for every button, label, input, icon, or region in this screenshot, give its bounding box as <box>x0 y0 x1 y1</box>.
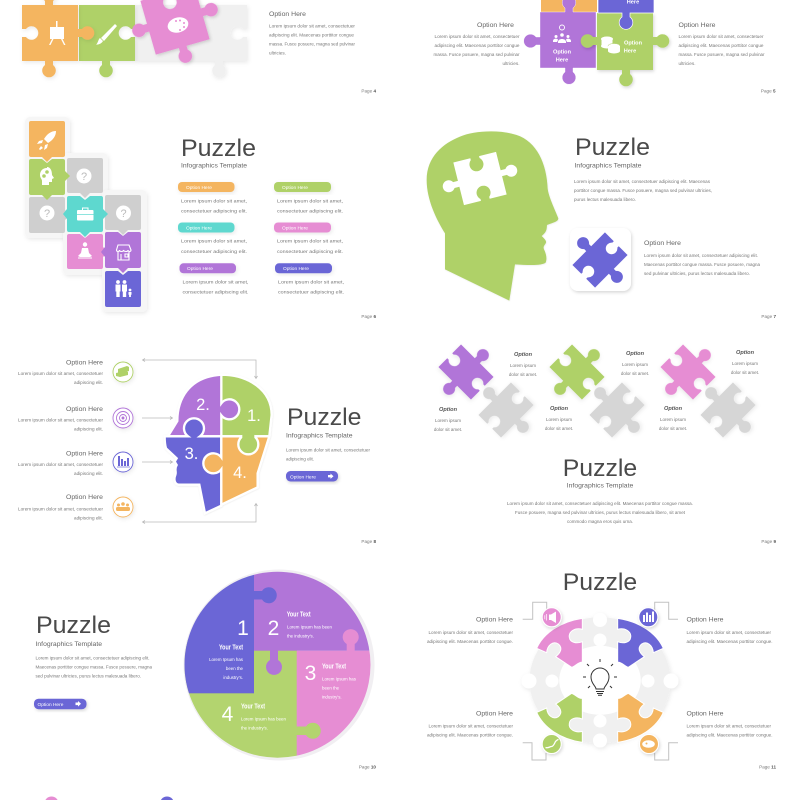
panel: page 11 puzzle ring <box>427 569 776 770</box>
icon: rocket <box>37 131 56 150</box>
pill: green option <box>274 182 331 192</box>
text: top left option: Option Here <box>476 617 513 624</box>
number 1: 1 <box>237 617 249 640</box>
panel: page 9 puzzle pieces <box>429 335 776 544</box>
icon: light bulb <box>583 659 617 695</box>
teal tile <box>63 196 108 237</box>
text: page 4 option: Lorem ipsum dolor sit amet, consectetuer <box>269 24 356 28</box>
text: option 3: Option Here <box>66 451 103 458</box>
grey tile right <box>105 195 141 235</box>
text: purple option: Option <box>514 352 533 358</box>
connectors <box>523 602 678 760</box>
circle pieces <box>184 572 370 758</box>
connector: third <box>142 460 172 464</box>
text block <box>181 198 247 214</box>
paragraph: Lorem ipsum dolor sit amet, consectetuer adipiscing elit. <box>36 655 150 660</box>
circle backing ring <box>184 570 374 760</box>
panel: page 5 puzzle cross <box>434 0 776 94</box>
text: option 1 <box>18 360 104 385</box>
text: bottom right option: Lorem ipsum dolor sit amet, consectetuer <box>686 724 772 728</box>
page number 9: Page 9 <box>761 539 776 544</box>
text: grey 3 option: dolor sit amet. <box>659 426 687 431</box>
puzzle piece: green <box>581 13 669 86</box>
paragraph <box>507 501 693 524</box>
page number 5: Page 5 <box>761 88 776 94</box>
text: segment 3: Your Text <box>322 662 346 671</box>
subtitle: Infographics Template <box>181 162 247 170</box>
number 3: 3 <box>305 662 316 685</box>
text: option 4 <box>18 494 104 520</box>
panel: page 6 text <box>178 135 376 319</box>
text block <box>277 198 343 214</box>
text block <box>182 280 248 295</box>
text: option: Maecenas porttitor congue massa. Fusce posuere, magna <box>644 262 760 267</box>
text: pink option: dolor sit amet. <box>731 370 759 375</box>
pill: blue option <box>275 263 332 273</box>
text: option 4: adipiscing elit. <box>74 516 103 520</box>
icon: question grey right <box>116 206 131 220</box>
ring icon: purple target <box>113 408 133 428</box>
notches in grey ring <box>522 613 678 748</box>
text: option 4: Option Here <box>66 494 103 501</box>
icon: question grey left <box>40 206 54 220</box>
icon: family <box>115 280 132 297</box>
puzzle piece: orange <box>541 0 597 12</box>
knob: blue <box>254 587 277 603</box>
orange tile <box>29 121 65 162</box>
text block: Lorem ipsum dolor sit amet, <box>181 239 247 244</box>
text: option 4: Lorem ipsum dolor sit amet, consectetuer <box>18 506 104 512</box>
text block <box>278 280 344 295</box>
text: bottom right option: Option Here <box>686 710 724 718</box>
green tile <box>29 159 70 200</box>
text: option 1: adipiscing elit. <box>74 380 103 385</box>
text block: Lorem ipsum dolor sit amet, <box>182 280 248 284</box>
connector: top <box>142 358 258 378</box>
paragraph: commodo magna eros quis urna. <box>567 519 633 524</box>
text: top left option: adipiscing elit. Maecenas porttitor congue. <box>427 639 513 644</box>
paragraph: Lorem ipsum dolor sit amet, consectetuer adipiscing elit. Maecenas porttitor congue massa. <box>507 501 693 506</box>
puzzle cut-out in head <box>438 148 522 209</box>
pill: pink option: Option Here <box>282 225 308 231</box>
text: grey 2 option <box>545 406 573 431</box>
text block: consectetuer adipiscing elit. <box>182 290 248 295</box>
title: Puzzle <box>181 135 256 162</box>
badge: orange cloud <box>640 734 658 754</box>
puzzle piece: purple <box>524 0 596 84</box>
icon: question grey right: ? <box>120 208 127 220</box>
text: segment 4: Your Text <box>241 702 265 711</box>
puzzle piece: grey <box>135 5 247 77</box>
paragraph: porttitor congue massa. Fusce posuere, magna sed pulvinar ultricies, <box>574 188 712 193</box>
paragraph <box>574 179 712 202</box>
text: page 5 right option: Lorem ipsum dolor sit amet, consectetuer <box>678 34 764 39</box>
piece: green 4 <box>184 640 297 758</box>
label: option here purple: Here <box>556 58 568 64</box>
text: top right option: Lorem ipsum dolor sit amet, consectetuer <box>686 630 772 635</box>
text: option 2: adipiscing elit. <box>74 426 103 432</box>
text: page 4 option: ultricies. <box>269 50 286 56</box>
text block: consectetuer adipiscing elit. <box>181 208 247 214</box>
text: top right option: adipiscing elit. Maecenas porttitor congue. <box>686 639 772 644</box>
text: page 5 right option: ultricies. <box>678 61 696 66</box>
title: Puzzle <box>287 404 362 431</box>
icon: briefcase <box>77 208 94 220</box>
piece: pink <box>651 335 725 409</box>
text: page 4 option <box>269 11 356 56</box>
icon: question grey top <box>76 168 92 184</box>
number 1: 1. <box>247 407 261 425</box>
text: grey 3 option: Option <box>664 406 683 412</box>
text: grey 1 option: Option <box>439 407 458 413</box>
label: option here green: Here <box>624 48 636 54</box>
number 2: 2. <box>196 396 210 414</box>
icon: question grey left: ? <box>44 208 50 220</box>
text: bottom left option: Lorem ipsum dolor sit amet, consectetuer <box>428 724 514 728</box>
label: option here purple: Option <box>553 50 571 56</box>
text: segment 1 <box>209 642 244 680</box>
text: segment 3 <box>322 662 357 700</box>
head silhouette <box>427 131 558 301</box>
text block <box>277 239 343 254</box>
icon: meditating person <box>78 242 92 258</box>
text: grey 2 option: Lorem ipsum <box>546 417 572 422</box>
text: grey 2 option: dolor sit amet. <box>545 426 573 431</box>
text: segment 1: Your Text <box>219 642 243 652</box>
text: segment 3: been the <box>322 686 340 690</box>
text: option: sed pulvinar ultricies, purus lectus malesuada libero. <box>644 271 750 276</box>
puzzle piece: green <box>79 5 135 77</box>
text: grey 3 option: Lorem ipsum <box>660 417 686 422</box>
text: page 5 left option: massa. Fusce posuere, magna sed pulvinar <box>434 52 520 57</box>
text: segment 2: Your Text <box>287 610 311 619</box>
piece: green <box>537 693 582 742</box>
text: bottom right option: adipiscing elit. Maecenas porttitor congue. <box>686 732 772 738</box>
ring icon: blue chart <box>113 452 133 472</box>
next page knobs at bottom edge <box>44 796 174 800</box>
text: option 3: Lorem ipsum dolor sit amet, consectetuer <box>18 462 104 467</box>
pink tile <box>67 234 108 269</box>
knob: purple <box>266 650 282 675</box>
panel: page 4 puzzle strip <box>22 0 376 93</box>
paragraph: purus lectus malesuada libero. <box>574 197 636 202</box>
paragraph <box>286 448 370 462</box>
paragraph <box>36 655 152 678</box>
subtitle: Infographics Template <box>286 432 353 440</box>
paragraph: Fusce posuere, magna sed pulvinar ultricies, purus lectus malesuada libero, sit amet <box>515 510 686 515</box>
piece: purple <box>429 335 503 409</box>
text: grey 1 option <box>434 407 462 432</box>
icon: paint brush <box>96 24 117 45</box>
button: Option Here <box>38 702 64 708</box>
panel: page 6 icon tiles <box>25 117 147 312</box>
text: option 3: adipiscing elit. <box>74 471 103 476</box>
panel: page 7 head <box>427 131 776 319</box>
text: option <box>644 240 760 276</box>
text: grey 3 option <box>659 406 687 431</box>
pill: green option: Option Here <box>282 185 308 191</box>
card with blue puzzle piece <box>563 223 637 297</box>
icon: coins <box>601 36 620 54</box>
text: grey 1 option: dolor sit amet. <box>434 427 462 432</box>
icon: blue puzzle piece <box>563 223 637 297</box>
text: pink option: Lorem ipsum <box>732 361 758 366</box>
paragraph: sed pulvinar ultricies, purus lectus malesuada libero. <box>36 673 141 678</box>
ring icon: green cash <box>113 362 133 382</box>
tile backing: middle column <box>63 153 108 275</box>
grey tile left <box>29 197 70 233</box>
number 3: 3. <box>185 445 198 463</box>
piece: green 1 <box>221 375 272 436</box>
piece: orange <box>618 693 663 742</box>
text: pink option <box>731 350 759 375</box>
subtitle: Infographics Template <box>567 482 633 490</box>
pill: teal option: Option Here <box>186 225 212 231</box>
piece: blue 3 <box>165 418 221 513</box>
purple tile <box>101 232 141 273</box>
piece: purple 2 <box>168 375 239 436</box>
text: page 4 option: adipiscing elit. Maecenas porttitor congue <box>269 32 354 38</box>
piece: blue 1 <box>184 574 254 694</box>
piece: purple 2 <box>254 572 370 651</box>
text block: Lorem ipsum dolor sit amet, <box>277 198 343 203</box>
knob: pink <box>343 629 359 651</box>
pill: purple option: Option Here <box>187 266 213 272</box>
connector: bottom <box>142 504 258 524</box>
icon: head with gears <box>40 167 54 185</box>
text block: Lorem ipsum dolor sit amet, <box>181 198 247 203</box>
button: Option Here <box>290 474 316 480</box>
grey ring <box>522 613 678 748</box>
text: page 5 left option: Lorem ipsum dolor sit amet, consectetuer <box>434 34 520 39</box>
title: Puzzle <box>563 569 637 596</box>
text: segment 2: Lorem Ipsum has been <box>287 624 332 630</box>
text: option: Option Here <box>644 240 681 247</box>
green knob <box>238 434 258 454</box>
icon: easel <box>49 21 66 45</box>
puzzle piece: orange <box>22 0 94 77</box>
text: grey 2 option: Option <box>550 406 569 412</box>
text: green option <box>621 351 649 376</box>
piece: blue <box>618 618 663 667</box>
text: page 5 left option: ultricies. <box>502 61 520 66</box>
blue tile <box>105 271 141 307</box>
text: grey 1 option: Lorem ipsum <box>435 418 461 423</box>
text: segment 1: been the <box>226 666 244 671</box>
pill: teal option <box>178 222 234 232</box>
paragraph: adipiscing elit. <box>286 456 314 462</box>
piece: pink 3 <box>296 650 370 756</box>
text: bottom right option <box>686 710 772 738</box>
puzzle piece: blue <box>598 0 654 29</box>
text: bottom left option: Option Here <box>476 710 513 718</box>
text: option 1: Option Here <box>66 360 103 366</box>
text: segment 4: the industry's. <box>241 726 268 730</box>
knob: green <box>296 723 321 739</box>
text: option 2: Lorem ipsum dolor sit amet, consectetuer <box>18 418 104 422</box>
piece: green <box>540 335 614 409</box>
page number 10: Page 10 <box>359 764 376 770</box>
text: segment 1: industry's. <box>223 675 243 680</box>
icon: arrow <box>328 474 334 479</box>
text: option 1: Lorem ipsum dolor sit amet, consectetuer <box>18 371 104 376</box>
pill: blue option: Option Here <box>283 266 309 272</box>
text block: consectetuer adipiscing elit. <box>278 290 344 295</box>
number 4: 4. <box>233 464 247 482</box>
text: segment 2 <box>287 610 332 638</box>
icon: arrow <box>76 701 81 707</box>
text block: consectetuer adipiscing elit. <box>181 249 247 254</box>
piece: grey 2 <box>580 373 654 447</box>
pill: purple option <box>180 263 236 273</box>
green knob neck <box>242 433 254 440</box>
head puzzle pieces <box>165 375 272 513</box>
knob: blue <box>160 796 174 800</box>
badge: blue chart <box>639 608 658 627</box>
title: Puzzle <box>36 612 111 639</box>
text block <box>181 239 247 254</box>
text: page 5 right option: massa. Fusce posuere, magna sed pulvinar <box>678 52 765 57</box>
text: purple option <box>509 352 537 377</box>
tile backing: right column <box>102 190 147 312</box>
text: segment 2: the industry's. <box>287 634 314 638</box>
text: top right option: Option Here <box>686 617 724 624</box>
text: page 5 left option: adipiscing elit. Maecenas porttitor congue <box>434 43 520 48</box>
paragraph: Lorem ipsum dolor sit amet, consectetuer <box>286 448 370 452</box>
text: page 4 option: massa. Fusce posuere, magna sed pulvinar <box>269 42 355 46</box>
text block: Lorem ipsum dolor sit amet, <box>278 280 344 284</box>
text block: consectetuer adipiscing elit. <box>277 249 343 254</box>
text: option 2 <box>18 406 104 432</box>
tile backing: left column <box>25 117 70 238</box>
title: Puzzle <box>563 455 637 482</box>
text: top right option <box>686 617 772 644</box>
text block: Lorem ipsum dolor sit amet, <box>277 239 343 244</box>
text: page 5 right option: adipiscing elit. Maecenas porttitor congue <box>678 43 764 48</box>
text: segment 3: Lorem Ipsum has <box>322 676 357 682</box>
number 2: 2 <box>268 617 279 640</box>
text: option 3 <box>18 451 104 476</box>
button <box>286 471 338 482</box>
panel: page 8 puzzle head <box>18 358 376 544</box>
badge: green tool <box>542 734 561 754</box>
text: green option: Lorem ipsum <box>622 362 648 367</box>
pill: pink option <box>274 222 331 232</box>
knob: pink <box>44 796 58 800</box>
text: segment 4 <box>241 702 286 730</box>
text: top left option: Lorem ipsum dolor sit amet, consectetuer <box>428 630 514 635</box>
panel: page 10 puzzle circle <box>180 565 377 771</box>
page number 6: Page 6 <box>361 314 376 319</box>
piece: pink <box>537 618 582 667</box>
text: page 4 option: Option Here <box>269 11 306 18</box>
text: segment 3: industry's. <box>322 694 342 700</box>
text: purple option: Lorem ipsum <box>510 363 536 368</box>
text: page 5 left option: Option Here <box>477 22 514 29</box>
page number 11: Page 11 <box>759 764 776 770</box>
page number 7: Page 7 <box>761 314 776 319</box>
text: green option: Option <box>626 351 645 357</box>
page number 8: Page 8 <box>361 539 376 544</box>
pill: orange option: Option Here <box>186 185 212 191</box>
text: option: Lorem ipsum dolor sit amet, consectetuer adipiscing elit. <box>644 253 758 258</box>
icon: shop <box>116 245 131 260</box>
text: page 5 right option: Option Here <box>678 22 716 29</box>
title: Puzzle <box>575 134 650 161</box>
text: page 5 right option <box>678 22 765 66</box>
badge: pink speaker <box>542 608 561 627</box>
page number 4: Page 4 <box>361 88 376 94</box>
text: option 2: Option Here <box>66 406 103 413</box>
ring icon: orange team <box>113 497 133 517</box>
connector: second <box>142 416 172 420</box>
subtitle: Infographics Template <box>36 641 102 648</box>
text: top left option <box>427 617 514 644</box>
text: segment 1: Lorem Ipsum has <box>209 657 244 662</box>
text: pink option: Option <box>736 350 755 356</box>
icon: palette <box>166 15 190 35</box>
pill: orange option <box>178 182 234 192</box>
icon: people and pin <box>553 25 571 43</box>
puzzle piece: pink rotated <box>125 0 230 75</box>
text: bottom left option <box>427 710 514 738</box>
panel: page 10 left text <box>34 612 152 709</box>
text: segment 4: Lorem Ipsum has been <box>241 716 286 722</box>
text: page 5 left option <box>434 22 520 66</box>
grey tile top <box>67 158 103 198</box>
icon: question grey top: ? <box>81 171 87 183</box>
label: option here green: Option <box>624 40 642 46</box>
text block: consectetuer adipiscing elit. <box>277 208 343 214</box>
text: purple option: dolor sit amet. <box>509 372 537 377</box>
piece: grey 3 <box>691 373 765 447</box>
paragraph: Lorem ipsum dolor sit amet, consectetuer adipiscing elit. Maecenas <box>574 179 711 184</box>
paragraph: Maecenas porttitor congue massa. Fusce posuere, magna <box>36 664 152 669</box>
subtitle: Infographics Template <box>574 162 642 170</box>
text: green option: dolor sit amet. <box>621 371 649 376</box>
number 4: 4 <box>222 703 234 726</box>
piece: grey 1 <box>469 373 543 447</box>
text: bottom left option: adipiscing elit. Maecenas porttitor congue. <box>427 732 513 738</box>
piece: orange 4 <box>203 436 269 505</box>
